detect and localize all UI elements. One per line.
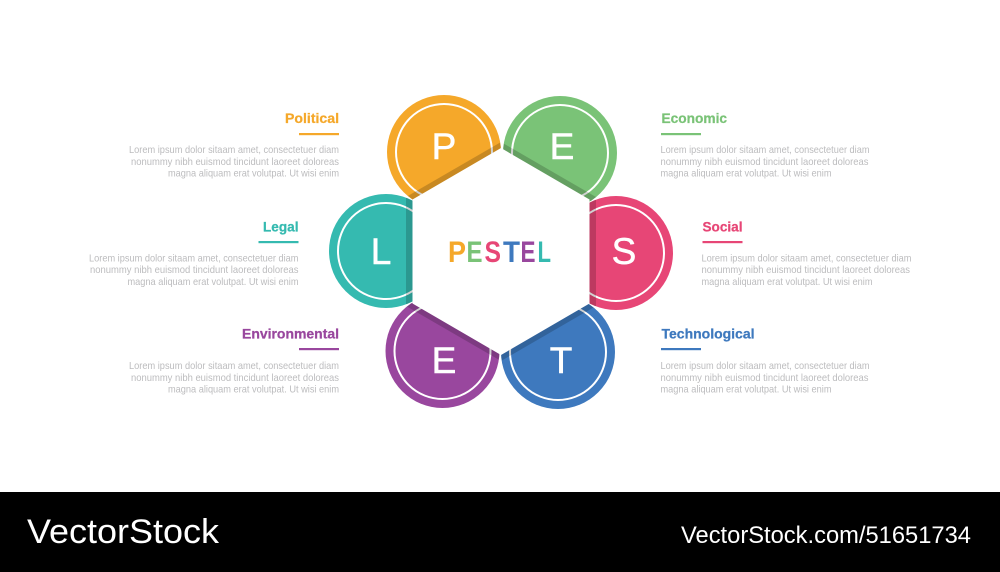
text block: Political: Lorem ipsum dolor sitaam amet, consectetuer diam <box>129 145 339 156</box>
circle: Technological <box>501 304 615 409</box>
footer brand: VectorStock <box>27 513 220 551</box>
text block: Environmental: nonummy nibh euismod tincidunt laoreet doloreas <box>131 373 339 384</box>
text block: Environmental: Lorem ipsum dolor sitaam amet, consectetuer diam <box>129 361 339 372</box>
center title: PESTEL: E <box>520 236 536 269</box>
text block: Political: magna aliquam erat volutpat. Ut wisi enim <box>168 168 339 180</box>
text block: Social: Lorem ipsum dolor sitaam amet, consectetuer diam <box>702 254 912 264</box>
center title: PESTEL: T <box>503 236 520 269</box>
footer image id: VectorStock.com/51651734 <box>681 522 971 549</box>
circle: Environmental <box>386 302 500 408</box>
text block: Social: Social <box>702 220 742 234</box>
text block: Technological <box>660 326 870 396</box>
text block: Economic: nonummy nibh euismod tincidunt laoreet doloreas <box>660 157 868 168</box>
circle: Legal <box>329 194 412 308</box>
text block: Economic: Lorem ipsum dolor sitaam amet, consectetuer diam <box>660 145 870 156</box>
text block: Political <box>129 111 339 180</box>
text block: Political: nonummy nibh euismod tincidunt laoreet doloreas <box>131 157 339 168</box>
text block: Political: Political <box>285 111 339 126</box>
text block: Environmental: magna aliquam erat volutpat. Ut wisi enim <box>168 384 339 396</box>
text block: Technological: Technological <box>662 326 754 342</box>
circle: Environmental: E <box>432 340 456 381</box>
text block: Social: magna aliquam erat volutpat. Ut wisi enim <box>702 277 872 288</box>
center title: PESTEL: P <box>448 236 466 269</box>
text block: Legal: Lorem ipsum dolor sitaam amet, consectetuer diam <box>89 254 298 264</box>
text block: Environmental: Environmental <box>242 326 339 342</box>
circle: Social: S <box>612 231 636 272</box>
circle: Economic <box>503 96 617 202</box>
text block: Legal: Legal <box>263 220 298 234</box>
center title: PESTEL: L <box>538 236 551 269</box>
footer bar <box>0 492 1000 572</box>
text block: Environmental <box>129 326 339 396</box>
circle: Political: P <box>432 126 456 167</box>
text block: Social: nonummy nibh euismod tincidunt laoreet doloreas <box>702 265 910 276</box>
central hexagon <box>412 148 590 355</box>
center title: PESTEL <box>448 236 551 269</box>
circle: Economic: E <box>550 126 574 167</box>
text block: Economic <box>660 111 870 180</box>
circle: Social <box>590 196 673 310</box>
circle: Political <box>387 95 501 200</box>
text block: Technological: magna aliquam erat volutpat. Ut wisi enim <box>660 384 832 396</box>
text block: Technological: Lorem ipsum dolor sitaam amet, consectetuer diam <box>660 361 870 372</box>
circle: Legal: L <box>371 231 391 272</box>
text block: Legal: magna aliquam erat volutpat. Ut wisi enim <box>128 277 298 288</box>
text block: Legal <box>89 220 298 288</box>
text block: Economic: Economic <box>662 111 727 126</box>
center title: PESTEL: S <box>484 236 501 269</box>
circle: Technological: T <box>550 340 572 381</box>
text block: Technological: nonummy nibh euismod tincidunt laoreet doloreas <box>660 373 868 384</box>
text block: Economic: magna aliquam erat volutpat. Ut wisi enim <box>660 168 832 180</box>
center title: PESTEL: E <box>466 236 482 269</box>
text block: Social <box>702 220 912 288</box>
text block: Legal: nonummy nibh euismod tincidunt laoreet doloreas <box>90 265 298 276</box>
